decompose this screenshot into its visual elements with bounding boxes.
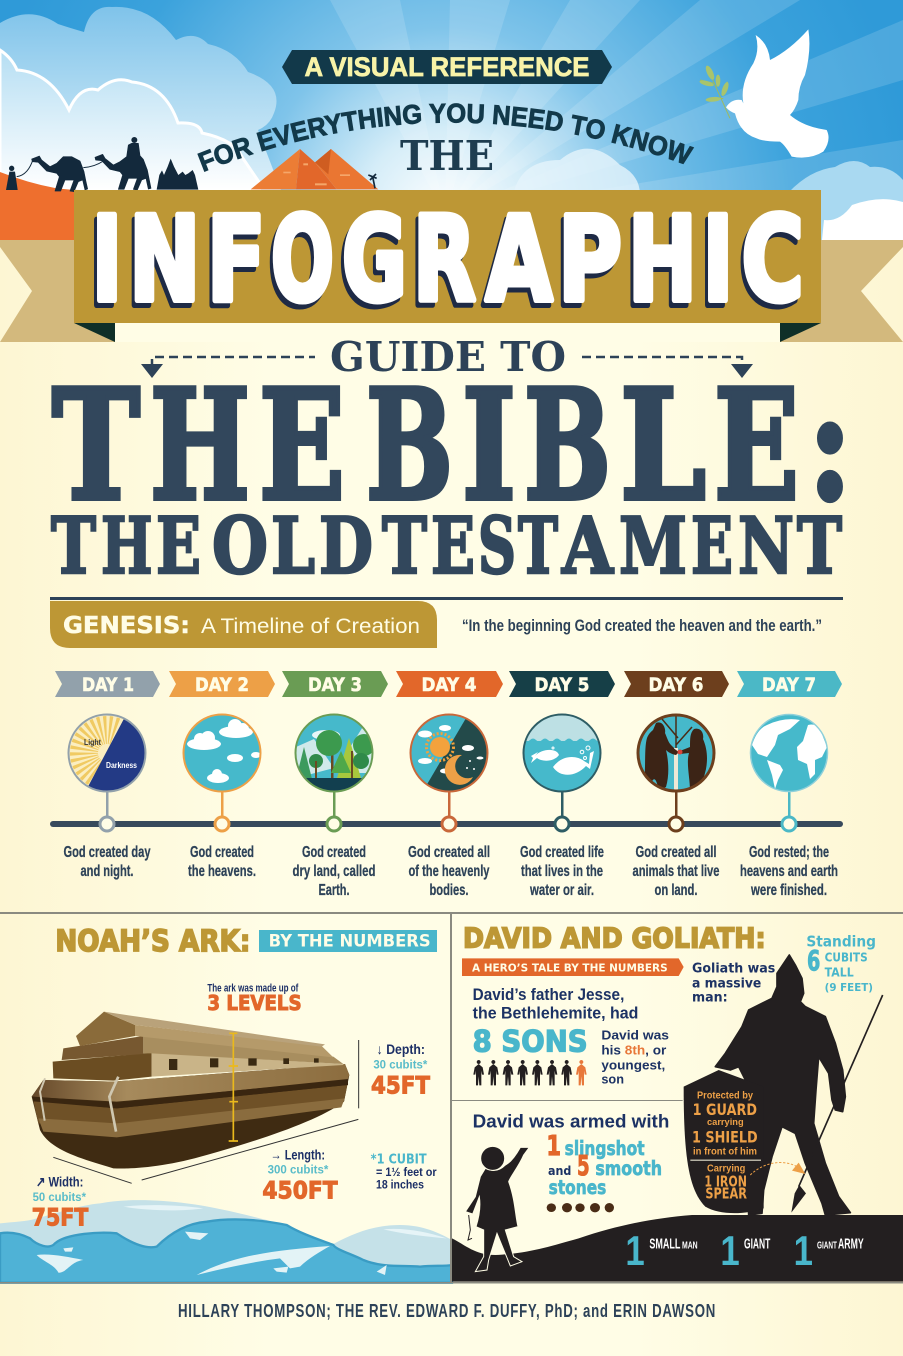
dimension lines xyxy=(53,1040,359,1183)
walker xyxy=(6,166,18,190)
subtitle: the old testament: N xyxy=(738,501,794,592)
sky scene xyxy=(0,0,903,240)
youngest note xyxy=(601,1027,669,1086)
day 7: were finished. xyxy=(750,882,827,899)
day 1: Darkness xyxy=(106,761,137,770)
banner with INFOGRAPHIC title: F xyxy=(204,196,263,333)
subtitle: the old testament: T xyxy=(51,501,96,592)
day 4: God created all xyxy=(408,844,490,861)
title: the bible: I xyxy=(462,356,516,534)
day 7: heavens and earth xyxy=(740,863,838,880)
spear xyxy=(791,995,883,1213)
armed text: David was armed with xyxy=(473,1110,669,1131)
title: the bible: B xyxy=(366,356,453,534)
group of people xyxy=(157,159,198,190)
banner with INFOGRAPHIC title: I xyxy=(702,191,734,328)
shield text: SPEAR xyxy=(705,1185,747,1202)
youngest note: son xyxy=(601,1071,624,1086)
shield text: carrying xyxy=(707,1117,744,1127)
tally: giant army: ARMY xyxy=(838,1236,864,1252)
cubit note: 18 inches xyxy=(376,1178,424,1192)
subtitle: the old testament: T xyxy=(797,501,842,592)
ground xyxy=(452,1215,903,1282)
goliath text xyxy=(692,961,775,1006)
width label: 50 cubits* xyxy=(33,1190,86,1204)
camel 2 with rider xyxy=(95,137,151,190)
subtitle: the old testament: E xyxy=(431,501,475,592)
day 6: God created all xyxy=(636,844,716,861)
banner with INFOGRAPHIC title: R xyxy=(410,196,473,333)
banner with INFOGRAPHIC title: C xyxy=(742,191,804,328)
panel: noah's ark xyxy=(0,924,452,1283)
depth label: 45FT xyxy=(371,1071,431,1099)
day 7 xyxy=(737,671,842,899)
banner with INFOGRAPHIC title: O xyxy=(271,191,334,328)
goliath silhouette xyxy=(715,955,850,1215)
depth label: ↓ Depth: xyxy=(377,1041,425,1057)
banner with INFOGRAPHIC title: F xyxy=(207,191,266,328)
height text xyxy=(806,934,876,994)
day 1: Light xyxy=(84,738,101,747)
banner with INFOGRAPHIC title: G xyxy=(339,196,404,333)
title: the bible: E xyxy=(259,356,345,534)
banner with INFOGRAPHIC title: P xyxy=(555,196,619,333)
far right cloud, pale xyxy=(789,161,903,240)
tally: small man xyxy=(625,1228,698,1274)
word THE: THE xyxy=(400,132,494,180)
banner with INFOGRAPHIC title: H xyxy=(628,191,697,328)
youngest note: David was xyxy=(601,1027,669,1042)
ark xyxy=(32,1012,349,1169)
authors: HILLARY THOMPSON; THE REV. EDWARD F. DUFFY, PhD; and ERIN DAWSON xyxy=(178,1301,716,1321)
left cloud, white xyxy=(0,48,261,190)
waves xyxy=(0,1200,452,1283)
badge: a visual reference: A VISUAL REFERENCE xyxy=(304,52,590,82)
caravan and pyramids xyxy=(6,137,378,192)
genesis heading: A Timeline of Creation xyxy=(201,615,420,638)
shield text: Carrying xyxy=(707,1164,745,1175)
width label: 75FT xyxy=(32,1204,89,1232)
subtitle: the old testament: S xyxy=(478,501,516,592)
shield text xyxy=(690,1090,761,1202)
day 5: water or air. xyxy=(529,882,594,899)
tally: small man: MAN xyxy=(682,1240,698,1251)
height text: CUBITS xyxy=(825,950,868,965)
title: the bible: : xyxy=(808,356,852,534)
stones xyxy=(547,1203,614,1212)
jesse text: David’s father Jesse, xyxy=(473,985,624,1004)
shield text: Protected by xyxy=(697,1090,753,1101)
shield text: 1 IRON xyxy=(704,1174,747,1191)
subtitle: the old testament: M xyxy=(619,501,687,592)
day 2 xyxy=(169,671,275,880)
levels label: 3 LEVELS xyxy=(207,991,302,1015)
sun rays xyxy=(330,0,903,190)
day 1: and night. xyxy=(80,863,134,880)
day 2: DAY 2 xyxy=(195,674,249,696)
rope rear xyxy=(83,161,103,168)
day 1: DAY 1 xyxy=(82,674,134,696)
day 2: God created xyxy=(190,844,254,861)
weapons text: smooth xyxy=(595,1157,662,1180)
left cloud, pale xyxy=(0,6,281,190)
subtitle: the old testament: E xyxy=(691,501,733,592)
day 5: that lives in the xyxy=(521,863,603,880)
day 4: bodies. xyxy=(430,882,468,899)
height text: Standing xyxy=(806,934,876,951)
goliath text: Goliath was xyxy=(692,961,775,976)
day 5: DAY 5 xyxy=(534,674,590,696)
far right cloud, white xyxy=(822,199,903,240)
youngest note: his 8th, or xyxy=(601,1042,666,1057)
title: the bible: L xyxy=(620,356,706,534)
dashed arrow xyxy=(750,1163,805,1175)
banner with INFOGRAPHIC title: I xyxy=(88,196,120,333)
depth label: 30 cubits* xyxy=(373,1057,428,1071)
weapons text: slingshot xyxy=(565,1137,645,1160)
banner with INFOGRAPHIC title: N xyxy=(129,191,200,328)
length label: → Length: xyxy=(271,1146,325,1162)
weapons text xyxy=(546,1129,662,1199)
day 6 xyxy=(624,671,729,899)
levels label: The ark was made up of xyxy=(207,983,298,995)
palm xyxy=(368,174,377,188)
title: the bible: H xyxy=(150,356,250,534)
shield text: 1 GUARD xyxy=(693,1100,757,1119)
weapons text: 1 xyxy=(546,1129,561,1162)
shield text: 1 SHIELD xyxy=(692,1127,758,1146)
subtitle: the old testament: E xyxy=(156,501,201,592)
subtitle: the old testament: D xyxy=(319,501,373,592)
day 6: animals that live xyxy=(632,863,720,880)
divider xyxy=(452,1100,683,1101)
tally: small man: 1 xyxy=(625,1228,645,1274)
length label: 300 cubits* xyxy=(268,1162,329,1176)
height measure xyxy=(229,1033,238,1141)
day 4 xyxy=(396,671,503,899)
width label xyxy=(32,1174,89,1232)
banner with INFOGRAPHIC title: I xyxy=(92,191,122,328)
weapons text: 5 xyxy=(577,1149,590,1182)
subtitle: the old testament: H xyxy=(101,501,152,592)
camel 1 xyxy=(32,156,88,192)
david silhouette xyxy=(465,1146,529,1272)
tally: giant xyxy=(720,1228,770,1274)
tally: small man: SMALL xyxy=(649,1236,680,1252)
shield text: in front of him xyxy=(693,1146,757,1157)
day 4: DAY 4 xyxy=(422,674,476,696)
banner with INFOGRAPHIC title: N xyxy=(126,196,198,333)
heading: david and goliath: DAVID AND GOLIATH: xyxy=(463,922,766,955)
tag: hero's tale: A HERO’S TALE BY THE NUMBERS xyxy=(472,961,668,974)
genesis heading: GENESIS: xyxy=(63,613,190,639)
height text: TALL xyxy=(825,965,854,980)
sons icons xyxy=(473,1060,587,1085)
weapons text: stones xyxy=(549,1176,606,1199)
height text: (9 FEET) xyxy=(825,981,873,994)
day 6: on land. xyxy=(654,882,698,899)
subtitle: the old testament: L xyxy=(271,501,315,592)
day 6: DAY 6 xyxy=(648,674,704,696)
guide to with arrows xyxy=(141,333,753,381)
title: the bible: E xyxy=(714,356,799,534)
banner with INFOGRAPHIC title: C xyxy=(738,196,801,333)
desert hill xyxy=(0,172,80,240)
jesse text: the Bethlehemite, had xyxy=(473,1003,638,1022)
day 5 xyxy=(509,671,615,899)
day 3: Earth. xyxy=(318,882,350,899)
panel: david and goliath xyxy=(452,922,903,1282)
length label xyxy=(262,1146,338,1204)
ribbon wings xyxy=(0,240,903,342)
banner with INFOGRAPHIC title: R xyxy=(413,191,476,328)
tally: giant army: GIANT xyxy=(817,1240,837,1251)
tag: hero's tale xyxy=(462,958,684,976)
banner with INFOGRAPHIC title: A xyxy=(486,191,552,328)
depth label xyxy=(371,1041,431,1099)
arc subtitle: FOR EVERYTHING YOU NEED TO KNOW xyxy=(197,103,694,172)
jesse text xyxy=(473,985,638,1022)
banner with INFOGRAPHIC title: H xyxy=(625,196,694,333)
subtitle: the old testament: T xyxy=(382,501,427,592)
eight sons: 8 SONS xyxy=(473,1025,588,1059)
day 1 xyxy=(55,671,160,880)
subtitle: the old testament: T xyxy=(518,501,558,592)
title: the bible: T xyxy=(52,356,140,534)
guide to with arrows: GUIDE TO xyxy=(330,333,566,381)
heading: noah's ark: NOAH’S ARK: xyxy=(55,924,250,958)
cubit note xyxy=(371,1152,437,1192)
pyramids xyxy=(251,149,378,189)
day 7: DAY 7 xyxy=(762,674,816,696)
subtitle: the old testament: A xyxy=(561,501,614,592)
day 3 xyxy=(282,671,388,899)
goliath text: man: xyxy=(692,991,728,1006)
tally: giant: GIANT xyxy=(744,1236,770,1252)
height text: 6 xyxy=(807,944,820,977)
cubit note: = 1½ feet or xyxy=(376,1165,437,1179)
length label: 450FT xyxy=(262,1176,338,1204)
day 5: God created life xyxy=(520,844,604,861)
width label: ↗ Width: xyxy=(36,1174,83,1190)
section frame lines xyxy=(0,912,903,1284)
title: the bible: B xyxy=(524,356,611,534)
right cloud xyxy=(516,148,640,190)
banner with INFOGRAPHIC title: I xyxy=(700,196,730,333)
sling xyxy=(468,1215,472,1240)
banner with INFOGRAPHIC title xyxy=(74,190,821,333)
day 1: God created day xyxy=(64,844,151,861)
day 7: God rested; the xyxy=(749,844,829,861)
dove with olive branch xyxy=(699,29,829,158)
day 2: the heavens. xyxy=(188,863,256,880)
day 3: DAY 3 xyxy=(308,674,362,696)
day 3: God created xyxy=(302,844,366,861)
rope front xyxy=(17,158,33,177)
subtitle: the old testament: O xyxy=(212,501,268,592)
youngest note: youngest, xyxy=(601,1057,665,1072)
tally: giant army xyxy=(794,1228,864,1274)
banner with INFOGRAPHIC title: G xyxy=(342,191,407,328)
goliath text: a massive xyxy=(692,976,761,991)
banner with INFOGRAPHIC title: O xyxy=(268,196,331,333)
levels label xyxy=(207,983,302,1015)
weapons text: and xyxy=(548,1163,571,1178)
tally: giant: 1 xyxy=(720,1228,740,1274)
day 4: of the heavenly xyxy=(408,863,490,880)
banner with INFOGRAPHIC title: A xyxy=(482,196,550,333)
tag: by the numbers: BY THE NUMBERS xyxy=(269,932,431,951)
genesis heading xyxy=(50,597,843,648)
day 3: dry land, called xyxy=(292,863,376,880)
timeline bar xyxy=(50,821,843,827)
tally: giant army: 1 xyxy=(794,1228,813,1274)
cubit note: *1 CUBIT xyxy=(371,1152,427,1167)
shield xyxy=(684,1070,764,1213)
banner with INFOGRAPHIC title: P xyxy=(558,191,622,328)
